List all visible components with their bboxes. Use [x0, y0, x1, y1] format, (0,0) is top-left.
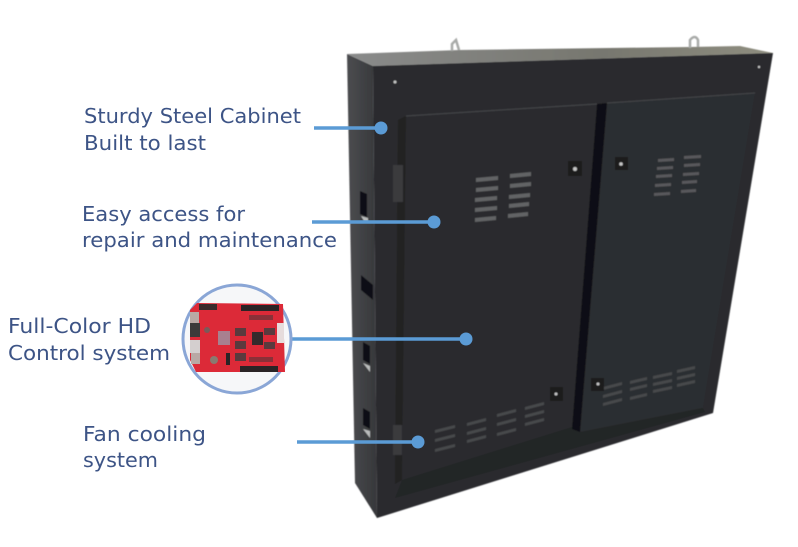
circuit board	[190, 303, 285, 372]
text line one: Full-Color HD	[8, 314, 151, 338]
pointer	[314, 122, 388, 134]
left door	[402, 104, 597, 480]
icon: control board circle	[183, 285, 291, 393]
side slots	[360, 191, 373, 429]
right door vents	[654, 155, 701, 196]
cabinet	[347, 37, 773, 518]
pointer	[292, 332, 472, 346]
text line one: Fan cooling	[83, 422, 206, 446]
side slot highlights	[361, 216, 370, 438]
pointer	[312, 216, 440, 228]
door latches	[393, 165, 403, 455]
handle screws and corner holes	[394, 66, 760, 396]
door handles	[550, 157, 628, 401]
lower door shadow	[395, 408, 705, 498]
subheading: Built to last	[84, 131, 206, 155]
heading: Sturdy Steel Cabinet	[84, 104, 301, 128]
right door	[580, 93, 755, 432]
dark band beside left door	[395, 116, 406, 484]
pointer	[297, 436, 424, 448]
text line one: Easy access for	[82, 202, 246, 226]
callout: sturdy steel cabinet	[84, 104, 388, 155]
text line two: Control system	[8, 341, 170, 365]
callout: control system	[8, 285, 472, 393]
text line two: repair and maintenance	[82, 228, 337, 252]
hanging lugs	[452, 37, 698, 51]
cabinet back face	[373, 53, 773, 518]
left door top edge	[406, 104, 597, 116]
upper vents	[475, 172, 531, 222]
door gap	[572, 103, 607, 432]
cabinet top face	[347, 46, 773, 66]
cabinet side face	[347, 54, 377, 518]
callout: fan cooling	[83, 422, 424, 472]
right door top edge	[607, 93, 755, 103]
text line two: system	[83, 448, 158, 472]
callout: easy access	[82, 202, 440, 252]
lower vents	[435, 366, 695, 452]
